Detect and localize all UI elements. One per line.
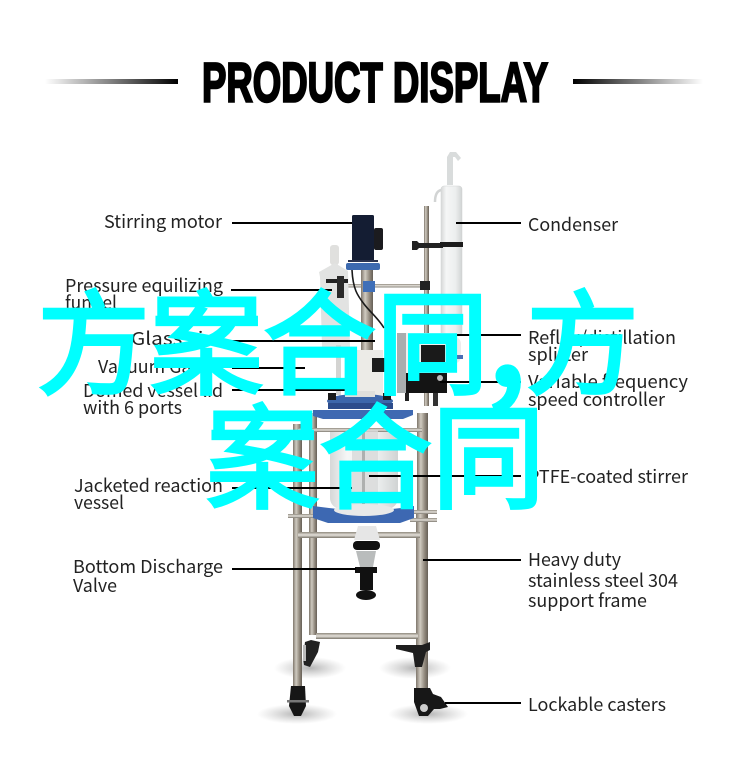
callout: pressure equilizing funnel: Pressure equilizing — [65, 272, 223, 298]
right title rule — [573, 79, 703, 84]
callout: heavy duty stainless steel support frame: support frame — [528, 587, 647, 613]
callout: domed vessel lid: Domed vessel lid — [83, 377, 223, 403]
title text: PRODUCT DISPLAY — [202, 50, 548, 114]
callout: reflux distillation splitter — [447, 324, 676, 367]
reactor apparatus — [257, 152, 468, 724]
callout: bottom discharge valve: Bottom Discharge — [73, 553, 223, 579]
callout: heavy duty stainless steel support frame — [423, 546, 678, 613]
callout: jacketed reaction vessel: vessel — [74, 489, 124, 515]
support rod with clamps — [347, 206, 463, 406]
frame — [288, 413, 437, 689]
callout: reflux distillation splitter: Reflux/distillation — [528, 324, 676, 350]
heading: product display — [45, 50, 703, 114]
floor shadows — [257, 657, 468, 724]
overlay comma: , — [486, 212, 528, 429]
stirring motor — [346, 215, 383, 270]
overlay line 1: 方案合同 — [37, 254, 489, 418]
callout: reflux distillation splitter: splitter — [528, 341, 589, 367]
callout: glass vial: Glass vial — [131, 325, 221, 351]
callout: bottom discharge valve: Valve — [73, 572, 117, 598]
vessel lid flange — [313, 391, 413, 419]
callout: jacketed reaction vessel: Jacketed reaction — [74, 472, 223, 498]
callout: stirring motor: Stirring motor — [104, 208, 223, 234]
callout: domed vessel lid: with 6 ports — [83, 394, 182, 420]
callout: heavy duty stainless steel support frame: Heavy duty — [528, 546, 622, 572]
condenser — [435, 152, 463, 364]
callout: PTFE-coated stirrer: PTFE-coated stirrer — [528, 463, 689, 489]
overlay line 1 end: 方 — [526, 254, 639, 418]
callout: condenser: Condenser — [528, 211, 619, 237]
callout: pressure equilizing funnel: funnel — [65, 289, 117, 315]
vessel bottom support — [313, 504, 414, 523]
callout: pressure equilizing funnel — [65, 272, 332, 315]
bottom discharge valve — [353, 526, 380, 600]
casters — [287, 640, 448, 716]
callout: variable frequency speed controller — [440, 368, 689, 412]
control box — [397, 333, 447, 406]
callout: heavy duty stainless steel support frame: stainless steel 304 — [528, 567, 678, 593]
central shaft — [352, 268, 394, 400]
callout: variable frequency speed controller: Variable frequency — [528, 368, 689, 394]
callout: vacuum gauge: Vacuum Gauge — [98, 353, 222, 379]
overlay text: cyan watermark — [37, 212, 639, 532]
callout: bottom discharge valve — [73, 553, 356, 598]
callout: lockable casters: Lockable casters — [528, 691, 666, 717]
callout: jacketed reaction vessel — [74, 472, 352, 515]
jacketed glass vessel — [330, 418, 398, 516]
left title rule — [45, 79, 178, 84]
callout: variable frequency speed controller: speed controller — [528, 386, 666, 412]
callout: domed vessel lid — [83, 377, 345, 420]
overlay line 2: 案合同 — [206, 368, 545, 532]
pressure equalizing funnel — [319, 245, 350, 395]
